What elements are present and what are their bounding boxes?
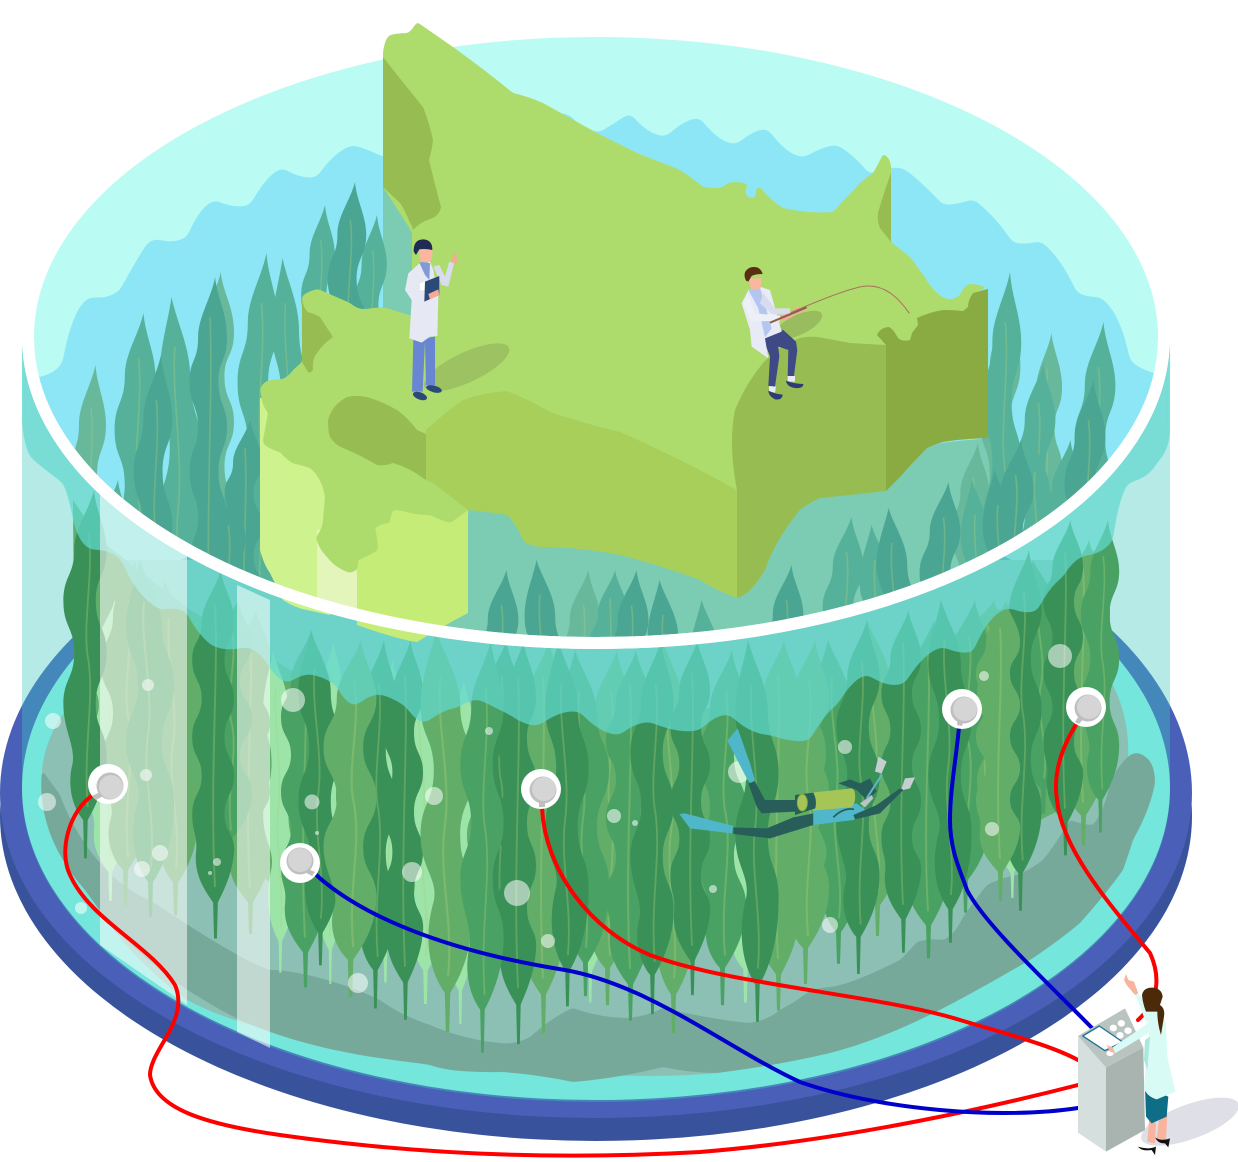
tank rim front — [22, 339, 1170, 649]
island yellow face — [357, 500, 468, 642]
island left lobe shade — [302, 297, 333, 373]
light columns through the glass — [100, 490, 270, 1048]
red cable one — [65, 795, 1078, 1156]
operator at control console — [1078, 974, 1238, 1156]
island mid cliff face — [426, 391, 737, 598]
red cable three — [1056, 723, 1156, 1020]
island upper left cliff — [383, 57, 441, 230]
blue cable one — [314, 873, 1078, 1113]
kelp forest: lower blades — [63, 490, 1119, 1053]
sensor — [942, 689, 982, 729]
island sink shade — [328, 396, 426, 480]
fisherman — [742, 267, 909, 400]
scientist with clipboard — [405, 239, 515, 402]
base disc — [0, 468, 1192, 1141]
teal water below island — [444, 439, 990, 636]
back seabed — [42, 560, 1150, 1076]
upper blades: medium — [91, 205, 1115, 901]
front light and mid blades — [324, 600, 1020, 1053]
tank floor — [22, 476, 1170, 1100]
island dark cliff face — [877, 289, 988, 491]
front seabed — [41, 753, 1155, 1082]
island pale column — [317, 530, 357, 612]
water surface skirt — [22, 340, 1170, 741]
blue wave interior — [39, 114, 1154, 531]
pale background blades — [91, 600, 1026, 1024]
island — [260, 22, 988, 642]
sensor — [521, 769, 561, 809]
light blades — [101, 540, 1103, 1033]
red cable two — [542, 808, 1078, 1060]
glass cylinder wall — [22, 340, 1170, 1102]
water bubbles — [38, 644, 1072, 993]
teal column behind island — [383, 187, 412, 320]
diver — [679, 728, 915, 838]
cables — [65, 723, 1156, 1156]
blue cable two — [950, 727, 1092, 1028]
sensor — [88, 764, 128, 804]
island upper surface — [260, 22, 987, 573]
upper blades: light — [70, 272, 1062, 871]
upper blades: dark — [134, 182, 1105, 881]
island lower left pale face — [260, 398, 330, 615]
dark blades — [63, 490, 1083, 1044]
island shaded cliff face — [732, 337, 886, 598]
tank rim — [28, 31, 1164, 643]
mid blades — [126, 520, 1119, 1021]
water surface from above — [34, 37, 1158, 637]
sensors — [88, 687, 1106, 883]
seabed — [41, 560, 1155, 1082]
green backing — [73, 500, 1110, 950]
island right peak shade — [878, 173, 891, 242]
sensor — [280, 843, 320, 883]
pale surface — [34, 37, 1158, 377]
sensor — [1066, 687, 1106, 727]
